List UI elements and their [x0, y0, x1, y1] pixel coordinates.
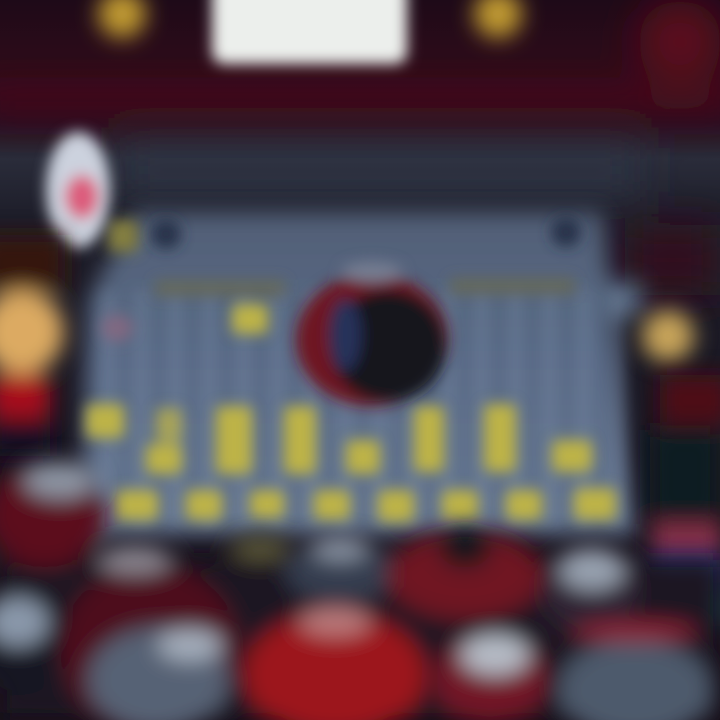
yellow board markers	[86, 220, 616, 522]
crowd of balls	[0, 462, 720, 720]
board vertical stripes	[95, 290, 625, 525]
right figure	[650, 375, 720, 626]
scoreboard panel	[80, 212, 642, 535]
upper wall band	[0, 0, 720, 295]
right lamp	[642, 310, 694, 362]
left lit figure	[0, 235, 65, 456]
board dark marks	[101, 217, 581, 342]
central ball	[296, 262, 448, 406]
white round sign	[46, 132, 110, 248]
ceiling light	[212, 0, 407, 64]
ceiling lamps	[98, 0, 522, 38]
